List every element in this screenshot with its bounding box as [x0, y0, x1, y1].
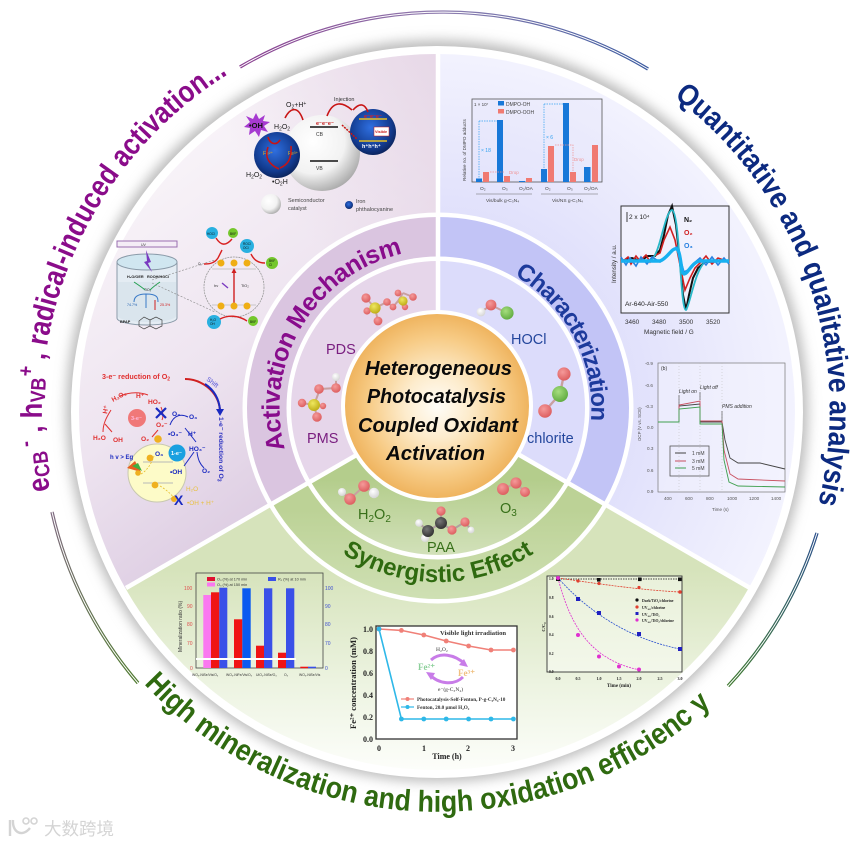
figure: 3-electron to 1-electron ozone reduction scheme: OH	[113, 437, 123, 444]
figure: reactor beaker and TiO2 mechanism: UV	[141, 243, 147, 247]
figure: Fe2+ concentration line chart: Visible light irradiation	[440, 630, 506, 637]
figure: 3-electron to 1-electron ozone reduction scheme: O₂⁻	[156, 422, 168, 429]
figure: open circuit potential chart: -0.3	[645, 404, 653, 409]
figure: iron phthalocyanine photocatalysis scheme: Visible	[375, 130, 387, 134]
figure: Fe2+ concentration line chart: 0	[377, 744, 381, 753]
figure: 3-electron to 1-electron ozone reduction scheme: X	[174, 492, 184, 508]
figure: 3-electron to 1-electron ozone reduction scheme: O₂	[172, 411, 180, 418]
decorative double arc: left	[52, 512, 138, 683]
figure: Fe2+ concentration line chart: Time (h)	[432, 752, 462, 761]
molecule: PAA	[415, 506, 474, 542]
figure: C/C0 decay chart: 0.0	[556, 676, 560, 681]
figure: DMPO adduct bar chart: Vis/bulk g-C₃N₄	[486, 198, 519, 204]
figure: reactor beaker and TiO2 mechanism: BPAP	[120, 320, 131, 324]
figure: reactor beaker and TiO2 mechanism: OCl	[243, 246, 249, 250]
figure: C/C0 decay chart: C/C₀	[541, 622, 546, 632]
figure: iron phthalocyanine photocatalysis scheme: +	[303, 101, 306, 107]
figure: iron phthalocyanine photocatalysis scheme: Iron	[356, 199, 365, 205]
figure: EPR spectra: 3520	[706, 319, 721, 326]
figure: reactor beaker and TiO2 mechanism: H₂O	[210, 318, 217, 322]
figure: open circuit potential chart: 1000	[727, 496, 738, 501]
inner white ring	[286, 256, 590, 560]
figure: C/C0 decay chart: 0.8	[549, 596, 554, 600]
figure: Fe2+ concentration line chart	[348, 625, 517, 761]
figure: 3-electron to 1-electron ozone reduction scheme: O₃	[189, 414, 197, 421]
figure: mineralization bar chart: 90	[187, 604, 193, 610]
molecule: O3	[497, 477, 530, 497]
figure: mineralization bar chart: 80	[187, 622, 193, 628]
figure: iron phthalocyanine photocatalysis scheme: •O	[272, 179, 280, 186]
figure: C/C0 decay chart: 2.0	[636, 676, 642, 681]
panel: activation mechanism outer sector	[79, 54, 436, 588]
figure: C/C0 decay chart: 0.4	[549, 633, 554, 637]
figure: DMPO adduct bar chart: O₂	[545, 186, 551, 192]
figure: open circuit potential chart: Light on	[679, 389, 697, 395]
outer caption: purple: CB	[33, 452, 50, 476]
molecule: PMS	[298, 373, 341, 422]
label: PAA: PAA	[427, 540, 455, 556]
center circle with title: Photocatalysis	[367, 386, 506, 408]
figure: Fe2+ concentration line chart: 0.6	[363, 669, 373, 678]
figure: C/C0 decay chart: UV₃₆₅/TiO₂/chlorine	[642, 619, 674, 623]
figure: iron phthalocyanine photocatalysis scheme: 2	[287, 126, 290, 132]
figure: C/C0 decay chart: 0.2	[549, 652, 554, 656]
figure: mineralization bar chart: 80	[325, 622, 331, 628]
molecule: PDS	[361, 290, 417, 325]
figure: mineralization bar chart: Mineralization ratio (%)	[178, 601, 184, 652]
figure: iron phthalocyanine photocatalysis scheme	[244, 97, 396, 214]
figure: C/C0 decay chart: 2.5	[658, 676, 662, 681]
figure: open circuit potential chart: (b)	[661, 366, 667, 372]
outer caption: green: High mineralization and high oxidation efficienc y	[145, 670, 709, 818]
figure: mineralization bar chart: 0	[325, 666, 328, 672]
figure: 3-electron to 1-electron ozone reduction scheme: H₂O	[93, 435, 106, 442]
outer caption: purple: , radical-induced activation...	[32, 72, 226, 360]
figure: reactor beaker and TiO2 mechanism: 74.7%	[127, 303, 138, 307]
heading: Characterization: Characterization	[518, 264, 608, 420]
figure: 3-electron to 1-electron ozone reduction scheme: O₂	[141, 436, 149, 443]
label: O3: O	[500, 501, 511, 517]
figure: reactor beaker and TiO2 mechanism: O₂	[198, 262, 202, 266]
figure: Fe2+ concentration line chart: 0.0	[363, 735, 373, 744]
figure: reactor beaker and TiO2 mechanism: BKF	[250, 320, 256, 324]
figure: iron phthalocyanine photocatalysis scheme: H	[246, 172, 251, 179]
figure: reactor beaker and TiO2 mechanism: 25.3%	[160, 303, 171, 307]
label: H2O2: 2	[368, 514, 374, 525]
center circle with title: Activation	[385, 443, 485, 465]
figure: 3-electron to 1-electron ozone reduction scheme: 3-e⁻ reduction of O	[102, 372, 167, 381]
figure: reactor beaker and TiO2 mechanism: HOCl	[207, 232, 215, 236]
figure: C/C0 decay chart: 0.6	[549, 615, 554, 619]
figure: EPR spectra: Ar-640-Air-550	[625, 301, 669, 308]
figure: mineralization bar chart: 0	[190, 666, 193, 672]
figure: 3-electron to 1-electron ozone reduction scheme: O₂	[202, 468, 210, 475]
figure: DMPO adduct bar chart: × 6	[546, 135, 553, 141]
center circle with title: Heterogeneous	[365, 358, 512, 380]
figure: mineralization bar chart: 100	[325, 586, 334, 592]
figure: reactor beaker and TiO2 mechanism	[117, 227, 278, 329]
figure: open circuit potential chart: 3 mM	[692, 459, 704, 465]
label: H2O2: H	[358, 507, 368, 523]
figure: Fe2+ concentration line chart: 2	[466, 744, 470, 753]
figure: iron phthalocyanine photocatalysis scheme: O	[286, 102, 291, 109]
figure: mineralization bar chart: 70	[325, 641, 331, 647]
figure: mineralization bar chart: O₃ (%) at 150 min	[217, 583, 247, 587]
outer caption: purple: -	[25, 442, 28, 446]
figure: 3-electron to 1-electron ozone reduction scheme: 2	[167, 376, 170, 382]
figure: open circuit potential chart: 0.3	[647, 446, 654, 451]
disc shadow	[66, 40, 808, 782]
label: chlorite: chlorite	[527, 431, 574, 447]
outer caption: purple: , h	[20, 404, 48, 431]
figure: iron phthalocyanine photocatalysis scheme: H	[283, 179, 288, 186]
figure: 3-electron to 1-electron ozone reduction scheme: 3-e⁻	[131, 416, 142, 422]
figure: EPR spectra: N₂	[684, 217, 692, 224]
figure: open circuit potential chart: -0.6	[645, 383, 653, 388]
figure: iron phthalocyanine photocatalysis scheme: Semiconductor	[288, 198, 325, 204]
figure: mineralization bar chart: UiO₂-NiSe/O₃	[256, 673, 277, 677]
figure: 3-electron to 1-electron ozone reduction scheme: HO₂	[148, 399, 161, 406]
figure: Fe2+ concentration line chart: 1.0	[363, 625, 373, 634]
figure: EPR spectra: O₂	[684, 230, 693, 237]
outer caption: blue: Quantitative and qualitative analysis	[678, 84, 850, 506]
figure: iron phthalocyanine photocatalysis scheme: •OH	[249, 121, 263, 130]
figure: EPR spectra: 2 x 10⁴	[629, 214, 650, 221]
figure: iron phthalocyanine photocatalysis scheme: 2	[259, 174, 262, 180]
figure: Fe2+ concentration line chart: Fe²⁺ concentration (mM)	[348, 637, 358, 729]
figure: open circuit potential chart: 0.6	[647, 468, 654, 473]
molecule: chlorite	[538, 367, 571, 418]
figure: mineralization bar chart: 100	[184, 586, 193, 592]
decorative double arc: right	[728, 533, 817, 686]
panel: synergistic effect outer sector	[126, 508, 748, 758]
figure: DMPO adduct bar chart: × 18	[481, 148, 491, 154]
figure: DMPO adduct bar chart: Drop	[509, 170, 519, 175]
figure: reactor beaker and TiO2 mechanism: ROOH/HOCl	[147, 275, 169, 279]
white disc base	[71, 46, 803, 778]
figure: C/C0 decay chart: Time (min)	[607, 684, 631, 689]
outer caption: purple: +	[20, 366, 32, 376]
figure: 3-electron to 1-electron ozone reduction scheme: Shift	[205, 376, 219, 390]
figure: mineralization bar chart: R₂ (%) at 10 min	[278, 578, 306, 582]
figure: 3-electron to 1-electron ozone reduction scheme: 1-e⁻	[171, 451, 182, 457]
figure: open circuit potential chart: Time (s)	[712, 507, 729, 512]
figure: 3-electron to 1-electron ozone reduction scheme: h v > Eg	[110, 455, 134, 461]
figure: Fe2+ concentration line chart: 0.8	[363, 647, 373, 656]
figure: 3-electron to 1-electron ozone reduction scheme: O₃	[155, 451, 163, 458]
figure: Fe2+ concentration line chart: 1	[422, 744, 426, 753]
figure: 3-electron to 1-electron ozone reduction scheme: •O₃⁻	[168, 431, 182, 438]
figure: iron phthalocyanine photocatalysis scheme: Fe³⁺	[288, 151, 298, 157]
figure: DMPO adduct bar chart: O₃	[502, 186, 508, 192]
figure: Fe2+ concentration line chart: Fenton, 20.0 µmol H₂O₂	[417, 705, 470, 711]
figure: C/C0 decay chart: 3.0	[678, 676, 682, 681]
figure: DMPO adduct bar chart: DMPO-OOH	[506, 110, 534, 116]
figure: 3-electron to 1-electron ozone reduction scheme: 3	[216, 479, 222, 482]
outer white ring	[242, 212, 634, 604]
outer caption: purple	[20, 72, 226, 491]
figure: C/C0 decay chart: 0.5	[576, 676, 580, 681]
figure: EPR spectra: Magnetic field / G	[644, 329, 694, 336]
figure: 3-electron to 1-electron ozone reduction scheme: H₂O	[186, 486, 198, 493]
figure: DMPO adduct bar chart: Drop	[574, 157, 584, 162]
figure: open circuit potential chart: 400	[664, 496, 672, 501]
figure: open circuit potential chart: 1400	[771, 496, 782, 501]
figure: C/C0 decay chart: 1.0	[549, 577, 554, 581]
figure: iron phthalocyanine photocatalysis scheme: 2	[291, 104, 294, 110]
figure: C/C0 decay chart: Dark/TiO₂/chlorine	[642, 599, 674, 603]
figure: DMPO adduct bar chart	[462, 99, 602, 204]
label: H2O2: 2	[385, 514, 391, 525]
figure: reactor beaker and TiO2 mechanism: OH	[210, 322, 215, 326]
figure: 3-electron to 1-electron ozone reduction scheme: H⁺	[188, 431, 197, 438]
panel: characterization outer sector	[440, 54, 795, 585]
figure: 3-electron to 1-electron ozone reduction scheme: 1-e⁻ reduction of O	[217, 417, 224, 479]
figure: EPR spectra: Intensity / a.u.	[611, 244, 618, 283]
inner oxidant sectors	[291, 261, 585, 555]
label: PDS: PDS	[326, 342, 356, 358]
figure: iron phthalocyanine photocatalysis scheme: O	[254, 172, 260, 179]
label: HOCl: HOCl	[511, 332, 546, 348]
figure: C/C0 decay chart	[541, 576, 682, 689]
figure: iron phthalocyanine photocatalysis scheme: 2	[251, 174, 254, 180]
figure: mineralization bar chart: O₃ (%) at 170 min	[217, 578, 247, 582]
figure: Fe2+ concentration line chart: 0.4	[363, 691, 373, 700]
figure: DMPO adduct bar chart: Vis/NS g-C₃N₄	[552, 198, 583, 204]
figure: iron phthalocyanine photocatalysis scheme: 2	[279, 126, 282, 132]
figure: mineralization bar chart	[178, 573, 334, 677]
figure: iron phthalocyanine photocatalysis scheme: H	[274, 124, 279, 131]
heading: Synergistic Effect: Synergistic Effect	[344, 542, 534, 585]
figure: DMPO adduct bar chart: O₂/OA	[519, 186, 534, 192]
figure: Fe2+ concentration line chart: e⁻(g-C₃N₄)	[438, 686, 463, 693]
watermark: 大数跨境	[44, 819, 114, 839]
figure: iron phthalocyanine photocatalysis scheme: Injection	[334, 97, 354, 103]
figure: Fe2+ concentration line chart: 0.2	[363, 713, 373, 722]
figure: 3-electron to 1-electron ozone reduction scheme: •OH	[170, 469, 182, 476]
figure: DMPO adduct bar chart: DMPO-OH	[506, 102, 531, 108]
figure: iron phthalocyanine photocatalysis scheme: e⁻e⁻e⁻	[316, 121, 334, 127]
figure: 3-electron to 1-electron ozone reduction scheme: H₂O₂	[111, 390, 128, 404]
figure: Fe2+ concentration line chart: H₂O₂	[436, 647, 448, 653]
figure: open circuit potential chart: 600	[685, 496, 693, 501]
figure: reactor beaker and TiO2 mechanism: TiO₂	[144, 288, 152, 292]
center circle with title	[341, 310, 533, 502]
heading: Activation Mechanism: Activation Mechanism	[261, 242, 401, 448]
outer caption: purple: e	[32, 478, 50, 491]
figure: reactor beaker and TiO2 mechanism: H₂O/OER	[127, 275, 144, 279]
heading bands	[247, 217, 629, 599]
figure: iron phthalocyanine photocatalysis scheme: O	[282, 124, 288, 131]
figure: mineralization bar chart: 90	[325, 604, 331, 610]
figure: iron phthalocyanine photocatalysis scheme: +H	[294, 102, 303, 109]
figure: iron phthalocyanine photocatalysis scheme: phthalocyanine	[356, 207, 393, 213]
figure: iron phthalocyanine photocatalysis scheme: h⁺h⁺h⁺	[362, 143, 381, 150]
label: O3: 3	[511, 508, 517, 519]
figure: open circuit potential chart: 5 mM	[692, 466, 704, 472]
figure: open circuit potential chart: 800	[706, 496, 714, 501]
figure: open circuit potential chart: 1200	[749, 496, 760, 501]
figure: DMPO adduct bar chart: O₂	[480, 186, 486, 192]
figure: Fe2+ concentration line chart: 3	[511, 744, 515, 753]
figure: iron phthalocyanine photocatalysis scheme: CB	[316, 132, 324, 138]
molecule: H2O2	[338, 480, 379, 505]
figure: iron phthalocyanine photocatalysis scheme: Fe²⁺	[263, 151, 274, 157]
figure: C/C0 decay chart: 1.5	[616, 676, 622, 681]
figure: DMPO adduct bar chart: O₃	[567, 186, 573, 192]
figure: reactor beaker and TiO2 mechanism: hv	[214, 283, 218, 288]
decorative double arc: top	[240, 12, 648, 69]
figure: reactor beaker and TiO2 mechanism: Cl	[269, 263, 272, 267]
figure: 3-electron to 1-electron ozone reduction scheme: H⁺	[136, 393, 145, 400]
figure: iron phthalocyanine photocatalysis scheme: catalyst	[288, 206, 307, 212]
label: H2O2: O	[374, 507, 385, 523]
figure: mineralization bar chart: WO₃-NiSe/Vis	[299, 673, 321, 677]
figure: reactor beaker and TiO2 mechanism: BKF	[230, 232, 236, 236]
figure: C/C0 decay chart: 1.0	[596, 676, 602, 681]
figure: mineralization bar chart: WO₃-NiFe/Vis/O₃	[226, 673, 253, 677]
figure: DMPO adduct bar chart: 1 × 10⁷	[474, 102, 489, 107]
figure: EPR spectra: 3500	[679, 319, 694, 326]
figure: open circuit potential chart	[637, 361, 785, 512]
figure: mineralization bar chart: 70	[187, 641, 193, 647]
figure: Fe2+ concentration line chart: Fe³⁺	[458, 668, 475, 678]
figure: EPR spectra: 3480	[652, 319, 667, 326]
center circle with title: Coupled Oxidant	[358, 415, 519, 437]
figure: mineralization bar chart: O₃	[284, 673, 289, 677]
figure: 3-electron to 1-electron ozone reduction scheme: H⁺	[102, 405, 110, 414]
figure: iron phthalocyanine photocatalysis scheme: e⁻e⁻e⁻	[364, 114, 382, 120]
figure: C/C0 decay chart: 0.0	[549, 670, 554, 674]
figure: EPR spectra: O₃	[684, 243, 693, 250]
watermark	[10, 818, 114, 839]
figure: reactor beaker and TiO2 mechanism: TiO₂	[241, 283, 249, 288]
figure: open circuit potential chart: Light off	[700, 385, 718, 391]
figure: open circuit potential chart: PMS addition	[722, 404, 752, 410]
figure: 3-electron to 1-electron ozone reduction scheme	[93, 372, 224, 508]
figure: EPR spectra	[611, 206, 729, 336]
figure: DMPO adduct bar chart: Relative no. of DMPO adducts	[462, 119, 467, 181]
figure: 3-electron to 1-electron ozone reduction scheme: •OH + H⁺	[187, 500, 214, 507]
figure: C/C0 decay chart: UV₃₆₅/TiO₂	[642, 613, 660, 617]
figure: open circuit potential chart: OCP (V vs. SCE)	[637, 407, 642, 441]
figure: open circuit potential chart: 1 mM	[692, 451, 704, 457]
figure: DMPO adduct bar chart: O₂/OA	[584, 186, 599, 192]
figure: mineralization bar chart: WO₃-NiSe/Vis/O₃	[192, 673, 219, 677]
figure: C/C0 decay chart: UV₃₆₅/chlorine	[642, 606, 666, 610]
figure: reactor beaker and TiO2 mechanism: BKF	[269, 259, 275, 263]
label: PMS: PMS	[307, 431, 338, 447]
molecule: HOCl	[477, 300, 514, 320]
figure: iron phthalocyanine photocatalysis scheme: 2	[280, 182, 283, 188]
figure: open circuit potential chart: -0.9	[645, 361, 653, 366]
figure: open circuit potential chart: 0.9	[647, 489, 654, 494]
figure: iron phthalocyanine photocatalysis scheme: VB	[316, 166, 323, 172]
figure: Fe2+ concentration line chart: Photocatalysis-Self-Fenton, P-g-C₃N₄-10	[417, 697, 506, 703]
figure: EPR spectra: 3460	[625, 319, 640, 326]
figure: 3-electron to 1-electron ozone reduction scheme: HO₃⁻	[189, 446, 206, 453]
outer caption: purple: VB	[30, 378, 46, 402]
figure: reactor beaker and TiO2 mechanism: ROCl	[243, 242, 251, 246]
figure: open circuit potential chart: 0.0	[647, 425, 654, 430]
figure: Fe2+ concentration line chart: Fe²⁺	[418, 662, 435, 672]
